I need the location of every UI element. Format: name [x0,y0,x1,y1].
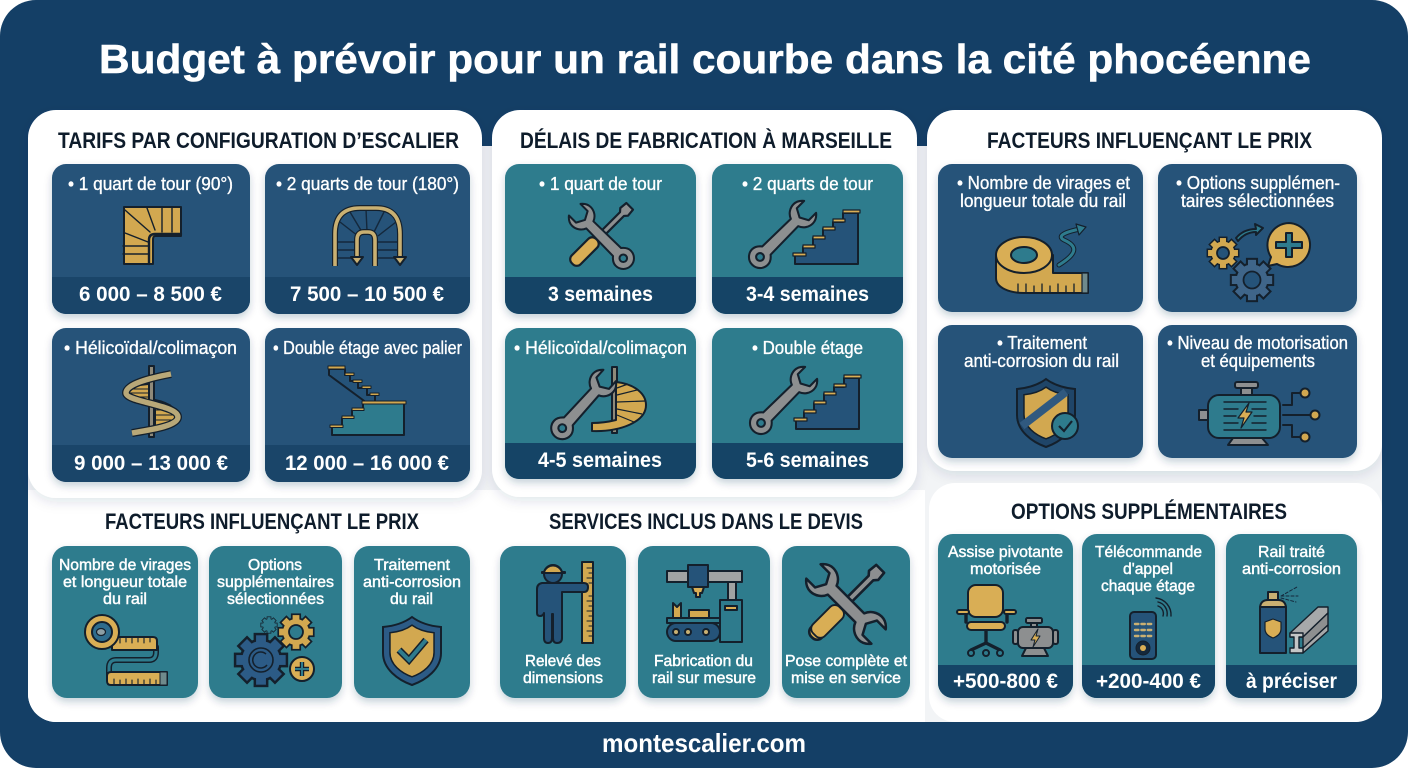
card: traitement anti-corrosion [938,325,1143,458]
icon: motor [1199,382,1320,445]
icon: spiral stair [126,366,178,437]
icon: wrench and stairs [743,197,860,274]
label: Télécommande [1095,544,1202,561]
panel: tarifs par configuration [28,110,482,498]
label [948,544,1063,578]
card: traitement bas [354,546,470,698]
label: rail sur mesure [652,670,756,687]
label: • Options supplémen- [1176,173,1340,193]
card: délai 1 quart de tour [505,164,696,314]
duration: 4-5 semaines [538,448,662,472]
label: dimensions [523,670,603,687]
price: 6 000 – 8 500 € [79,282,222,306]
footer: website: montescalier.com [602,728,806,758]
icon: gears [236,615,314,685]
icon: remote [1130,598,1171,659]
price: 7 500 – 10 500 € [290,282,444,306]
icon: chair and motor [957,585,1058,656]
label: • Traitement [997,333,1087,353]
icon: tape measure [996,224,1088,293]
label: d'appel [1123,561,1173,578]
label: Options [248,557,302,574]
label: et équipements [1201,351,1315,371]
icon: crossed tools [565,200,640,275]
price: à préciser [1246,669,1338,693]
duration: 3-4 semaines [746,282,869,306]
title: Budget à prévoir pour un rail courbe dans la cité phocéenne [99,36,1311,82]
card: fabrication [638,546,770,698]
card: relevé des dimensions [500,546,626,698]
heading: facteurs: FACTEURS INFLUENÇANT LE PRIX [987,128,1312,153]
icon: gears and plus [1208,223,1310,300]
icon: spray and rail [1260,587,1328,653]
label: • Nombre de virages et [957,173,1130,193]
panel: options supplémentaires [929,483,1382,722]
label: taires sélectionnées [1181,191,1334,211]
heading: facteurs bas: FACTEURS INFLUENÇANT LE PRIX [105,509,419,534]
card: niveau de motorisation [1158,325,1357,458]
label: • 1 quart de tour (90°) [68,174,233,194]
label: Traitement [374,557,451,574]
label [957,173,1130,211]
label: • Hélicoïdal/colimaçon [514,338,687,358]
label: chaque étage [1101,578,1195,595]
label [59,557,191,608]
icon: wrench and stairs [744,363,861,440]
price: +500-800 € [953,669,1058,693]
panel: facteurs influençant le prix (droite) [927,110,1382,471]
icon: tape measure unrolled [85,615,167,685]
card: délai 2 quarts de tour [712,164,903,314]
card: nombre de virages [938,164,1143,312]
label: du rail [103,591,147,608]
label: • 2 quarts de tour (180°) [276,174,459,194]
label [1167,333,1348,371]
label: • Niveau de motorisation [1167,333,1348,353]
label: motorisée [970,561,1041,578]
card: rail traité [1226,534,1357,698]
card: pose complète [782,546,910,698]
label: du rail [390,591,433,608]
label: et longueur totale [63,574,187,591]
label: anti-corrosion [363,574,461,591]
heading: tarifs: TARIFS PAR CONFIGURATION D’ESCALIER [58,128,459,153]
duration: 5-6 semaines [746,448,869,472]
label: mise en service [791,670,901,687]
heading: services: SERVICES INCLUS DANS LE DEVIS [549,509,863,534]
label [964,333,1119,371]
card: assise pivotante [938,534,1073,698]
label: longueur totale du rail [960,191,1126,211]
panel: facteurs et services (bas) [28,490,925,722]
duration: 3 semaines [548,282,653,306]
content area [28,146,1382,722]
price: 12 000 – 16 000 € [285,451,449,475]
icon: L-shaped stair [123,207,181,264]
icon: wrench and spiral [545,366,646,445]
card: nombre de virages bas [52,546,198,698]
icon: wrench and screwdriver [802,560,890,648]
card: 1 quart de tour [52,164,250,314]
heading: options: OPTIONS SUPPLÉMENTAIRES [1011,499,1287,524]
label: • 2 quarts de tour [742,174,873,194]
label [1095,544,1202,595]
icon: machine [667,565,742,642]
price: +200-400 € [1096,669,1201,693]
card: double étage [265,328,470,482]
label: Assise pivotante [948,544,1063,561]
card: 2 quarts de tour [265,164,470,314]
label: anti-corrosion [1242,561,1341,578]
price: 9 000 – 13 000 € [74,451,228,475]
card: télécommande [1082,534,1215,698]
card: options supplémentaires [1158,164,1357,312]
label [217,557,334,608]
label [523,653,603,687]
icon: double stair with landing [328,366,406,435]
card: hélicoïdal [52,328,250,482]
card: délai hélicoïdal [505,328,696,479]
label [652,653,756,687]
label: Pose complète et [785,653,908,670]
label [1242,544,1341,578]
panel: délais de fabrication [492,110,917,497]
label: supplémentaires [217,574,334,591]
label: Fabrication du [654,653,753,670]
icon: worker with ruler [537,562,593,643]
label: • Hélicoïdal/colimaçon [64,338,237,358]
label: Rail traité [1258,544,1325,561]
icon: U-shaped stair [335,208,406,266]
label: • Double étage [752,338,863,358]
label: Relevé des [525,653,601,670]
label [1176,173,1340,211]
card: délai double étage [712,328,903,479]
card: options bas [209,546,342,698]
label [785,653,908,687]
heading: délais: DÉLAIS DE FABRICATION À MARSEILLE [520,128,892,153]
icon: shield with check [1017,379,1078,447]
label: • 1 quart de tour [539,174,662,194]
label: anti-corrosion du rail [964,351,1119,371]
label: Nombre de virages [59,557,191,574]
label [363,557,461,608]
icon: shield check [383,617,441,685]
label: • Double étage avec palier [273,338,462,358]
label: sélectionnées [227,591,324,608]
